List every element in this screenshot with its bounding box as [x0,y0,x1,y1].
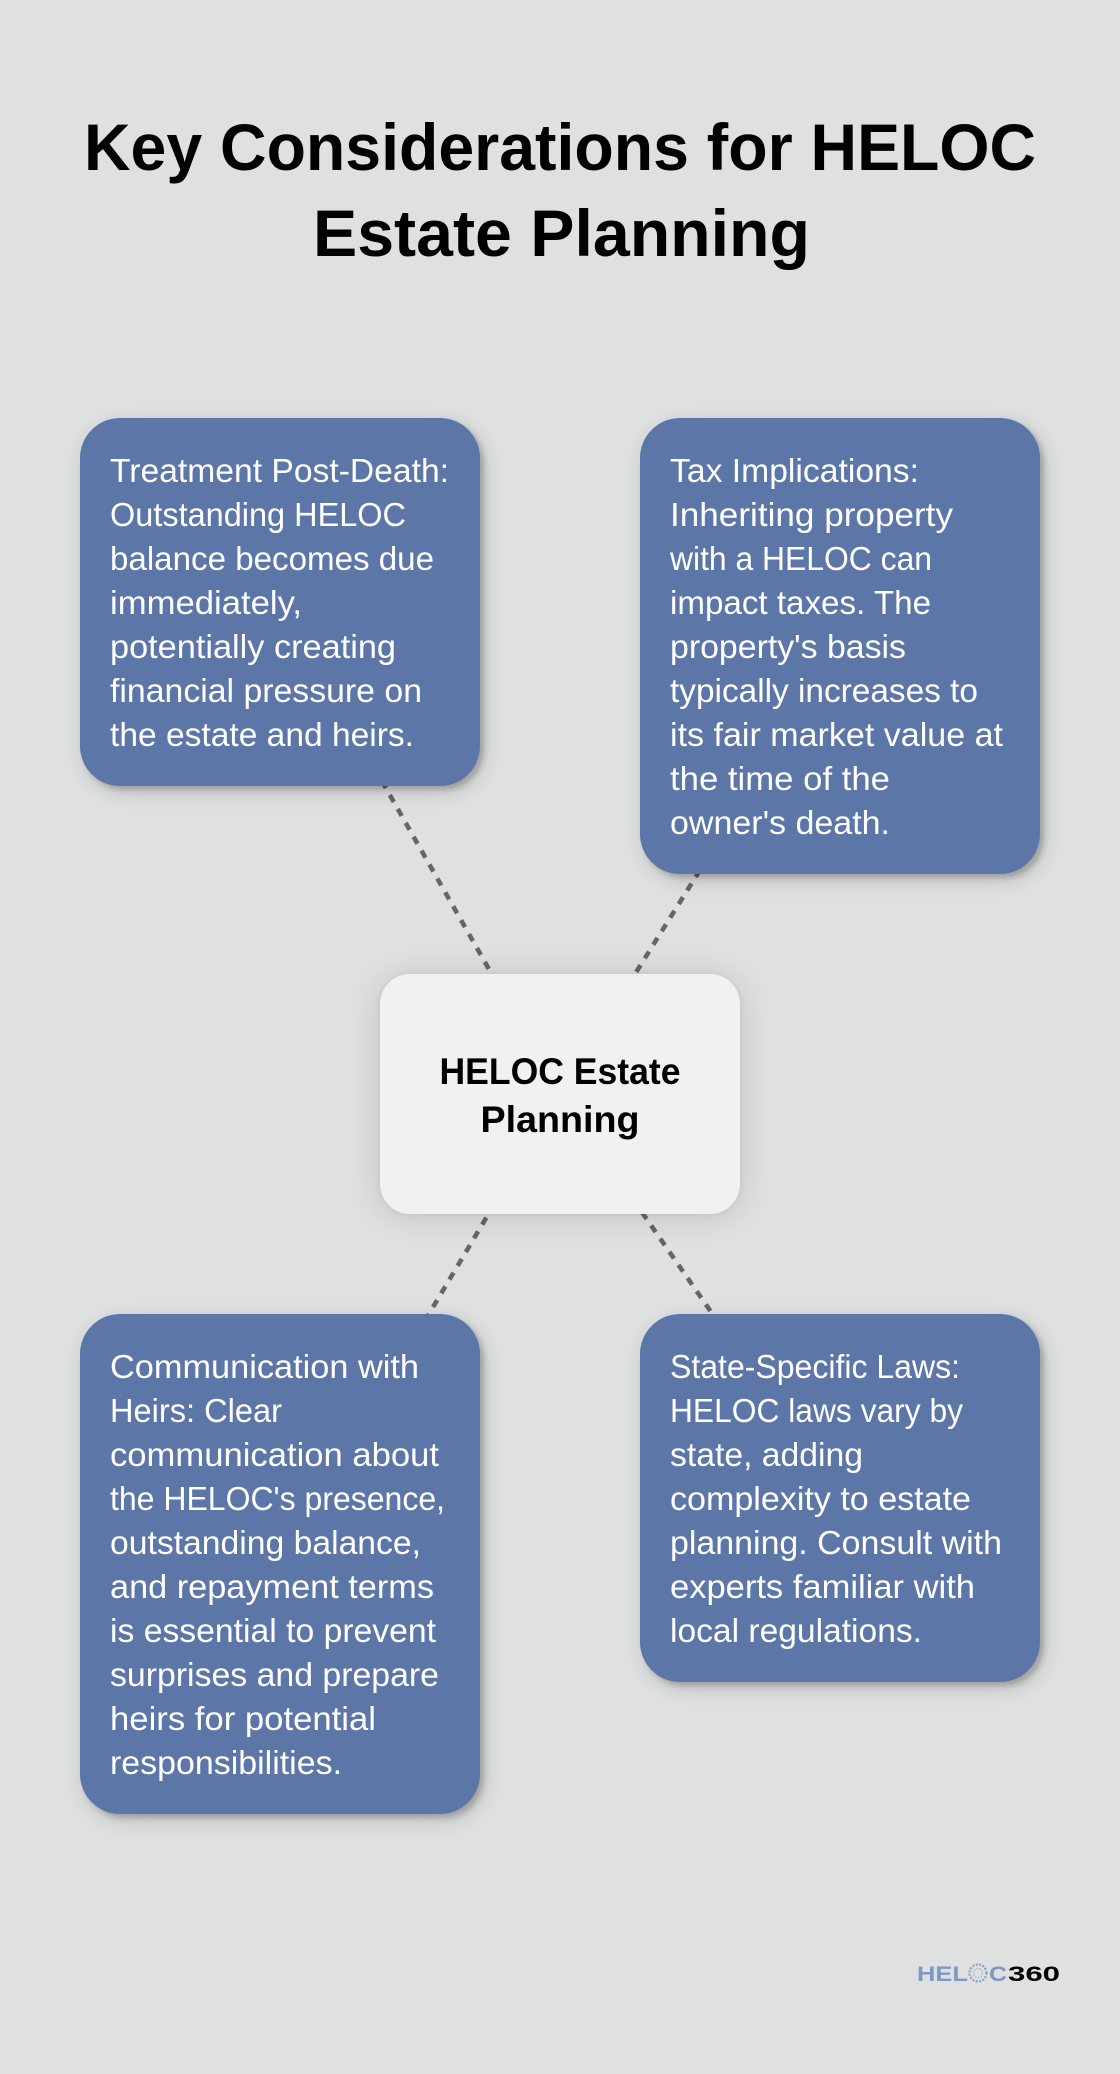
title: Estate Planning [313,196,810,270]
panel: treatment post-death: Treatment Post-Death: [110,452,449,489]
panel: communication with heirs: Communication with [110,1348,419,1385]
panel: communication with heirs [80,1314,480,1814]
panel: tax implications: with a HELOC can [669,540,932,577]
panel: communication with heirs: responsibilities. [110,1744,342,1781]
panel: treatment post-death: Outstanding HELOC [110,496,406,533]
panel: tax implications: impact taxes. The [670,584,931,621]
panel: tax implications: Tax Implications: [670,452,919,489]
logo: HELOC360: 360 [1008,1963,1060,1986]
panel: communication with heirs: heirs for potential [110,1700,376,1737]
panel: tax implications: the time of the [670,760,890,797]
panel: state-specific laws [640,1314,1040,1682]
panel: communication with heirs: is essential to prevent [110,1612,436,1649]
panel: state-specific laws: planning. Consult with [670,1524,1002,1561]
panel: communication with heirs: surprises and prepare [110,1656,439,1693]
panel: treatment post-death [80,418,480,786]
panel: state-specific laws: experts familiar with [670,1568,975,1605]
panel: communication with heirs: the HELOC's presence, [110,1480,445,1517]
panel: communication with heirs: communication about [110,1436,439,1473]
logo: HELOC360: C [989,1963,1007,1986]
panel: tax implications: Inheriting property [670,496,954,533]
panel: tax implications: property's basis [670,628,906,665]
panel: state-specific laws: state, adding [670,1436,863,1473]
title: Key Considerations for HELOC [84,110,1036,184]
panel: tax implications: typically increases to [670,672,978,709]
panel: tax implications: its fair market value at [670,716,1003,753]
panel: communication with heirs: Heirs: Clear [110,1392,282,1429]
panel: state-specific laws: complexity to estate [670,1480,971,1517]
panel: tax implications: owner's death. [670,804,890,841]
central hub: HELOC Estate Planning: Planning [480,1099,640,1140]
panel: communication with heirs: and repayment terms [110,1568,434,1605]
panel: state-specific laws: State-Specific Laws: [670,1348,960,1385]
panel: state-specific laws: HELOC laws vary by [670,1392,963,1429]
central hub: HELOC Estate Planning [380,974,740,1214]
central hub: HELOC Estate Planning: HELOC Estate [440,1051,680,1092]
panel: state-specific laws: local regulations. [670,1612,922,1649]
panel: treatment post-death: potentially creating [110,628,396,665]
panel: treatment post-death: balance becomes due [110,540,434,577]
panel: treatment post-death: immediately, [110,584,302,621]
panel: treatment post-death: financial pressure on [110,672,422,709]
panel: treatment post-death: the estate and heirs. [110,716,414,753]
title [84,110,1036,270]
panel: tax implications [640,418,1040,874]
panel: communication with heirs: outstanding balance, [110,1524,421,1561]
logo: HELOC360: HEL [917,1963,968,1986]
